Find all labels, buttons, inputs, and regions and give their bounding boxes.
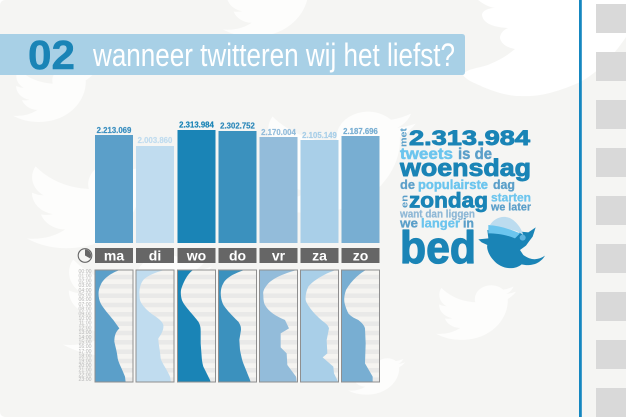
bar chart: [95, 120, 380, 243]
bar chart: 2.187.696: [343, 127, 379, 136]
day labels: vr: [272, 248, 286, 264]
bar chart: 2.213.069: [97, 126, 132, 135]
day labels: wo: [186, 248, 206, 264]
film strip squares: [596, 4, 626, 417]
text block: word cloud: met: [398, 128, 408, 147]
text block: word cloud: [398, 126, 532, 273]
hour labels: 01:00: [79, 274, 92, 280]
hour labels: 08:00: [79, 307, 92, 313]
hour labels: 20:00: [79, 363, 92, 369]
hour labels: 02:00: [79, 278, 92, 284]
hour labels: 18:00: [79, 354, 92, 360]
icon: clock: [78, 249, 92, 262]
text block: word cloud: starten: [491, 190, 531, 204]
section number: 02: [28, 32, 75, 78]
text block: word cloud: populairste: [418, 177, 488, 192]
day labels: [95, 248, 380, 264]
hour labels: 21:00: [79, 368, 92, 374]
day labels: do: [229, 248, 246, 264]
hour labels: 11:00: [79, 321, 92, 327]
hour labels: 04:00: [79, 288, 92, 294]
text block: word cloud: tweets: [400, 146, 453, 163]
hour labels: [79, 269, 92, 383]
text block: word cloud: dag: [493, 177, 515, 192]
hour labels: 14:00: [79, 335, 92, 341]
header band: [0, 32, 465, 78]
text block: word cloud: 2.313.984: [409, 126, 530, 150]
hour labels: 15:00: [79, 340, 92, 346]
hour labels: 09:00: [79, 311, 92, 317]
text block: word cloud: de: [400, 177, 415, 192]
hour labels: 06:00: [79, 297, 92, 303]
hour labels: 19:00: [79, 358, 92, 364]
hour labels: 07:00: [79, 302, 92, 308]
text block: word cloud: we later: [490, 202, 532, 214]
text block: word cloud: we: [399, 216, 418, 230]
hour labels: 00:00: [79, 269, 92, 275]
day labels: di: [149, 248, 161, 264]
hour labels: 13:00: [79, 330, 92, 336]
bar chart: 2.003.860: [138, 136, 173, 145]
hour labels: 23:00: [79, 377, 92, 383]
bar chart: 2.170.004: [261, 128, 297, 137]
text block: word cloud: in: [463, 216, 474, 230]
hour labels: 12:00: [79, 325, 92, 331]
divider line: [579, 0, 582, 417]
stripes: [95, 275, 380, 382]
bar chart: 2.302.752: [220, 122, 256, 130]
day labels: ma: [104, 248, 124, 264]
hour labels: 10:00: [79, 316, 92, 322]
hour labels: 03:00: [79, 283, 92, 289]
bar chart: 2.105.149: [302, 131, 338, 140]
icon: sleeping bird with nightcap: [478, 217, 545, 268]
hour labels: 17:00: [79, 349, 92, 355]
text block: word cloud: langer: [421, 216, 460, 230]
bar chart: 2.313.984: [179, 120, 215, 130]
text block: word cloud: en: [400, 195, 410, 208]
text block: word cloud: woensdag: [399, 155, 531, 182]
day labels: za: [312, 248, 327, 264]
day labels: zo: [353, 248, 368, 264]
text block: word cloud: want dan liggen: [399, 208, 475, 220]
text block: word cloud: zondag: [409, 190, 488, 212]
hour labels: 05:00: [79, 292, 92, 298]
hour labels: 22:00: [79, 372, 92, 378]
text block: word cloud: is de: [458, 146, 492, 163]
title: wanneer twitteren wij het liefst?: [92, 37, 455, 73]
text block: word cloud: bed: [400, 222, 476, 273]
hourly area charts: [95, 270, 380, 382]
hour labels: 16:00: [79, 344, 92, 350]
